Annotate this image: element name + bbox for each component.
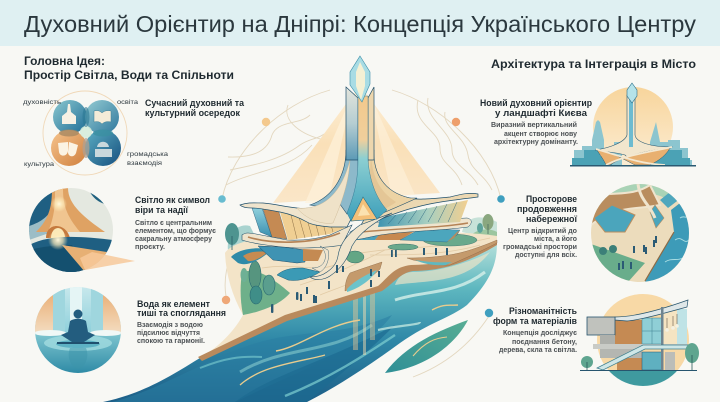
upper facade left (252, 208, 272, 237)
right roof wing (360, 185, 478, 227)
arc and contour lines (222, 90, 501, 377)
text: modern hub: культурний осередок (145, 108, 240, 118)
river (103, 243, 497, 402)
column (346, 87, 358, 160)
text: embankment body: громадські простори (503, 242, 577, 251)
panel: water (34, 287, 226, 373)
text: light body: проєкту. (135, 242, 165, 251)
building (240, 185, 478, 280)
lower floor (600, 349, 642, 358)
heading: architecture: Архітектура та Інтеграція в Місто (491, 58, 696, 71)
lawn and trees (225, 214, 494, 315)
text: water body: підсилює відчуття (137, 328, 200, 337)
panel: light (29, 188, 216, 272)
icon: church (62, 104, 76, 124)
label: education: освіта (117, 98, 138, 106)
icon: book (94, 111, 111, 124)
panel: materials (493, 294, 699, 387)
text: light body: сакральну атмосферу (135, 234, 213, 243)
label: community interaction: громадська (127, 151, 168, 158)
upper floor (615, 320, 642, 344)
people (271, 248, 448, 313)
terrace and promenade (198, 232, 497, 361)
header band (0, 0, 720, 46)
text: light heading: Світло як символ (135, 195, 210, 205)
text: water heading: Вода як елемент (137, 299, 210, 309)
text: water heading: тиші та споглядання (137, 308, 226, 318)
stairs (597, 345, 690, 370)
roof (615, 300, 688, 321)
illustration: light circle (29, 188, 135, 272)
floor slab (600, 335, 615, 344)
lower storey left (258, 246, 305, 263)
panel: new landmark (480, 83, 696, 170)
text: materials heading: Різноманітність (509, 306, 577, 316)
illustration: meditation circle (34, 287, 122, 373)
text: embankment body: доступні для всіх. (515, 250, 577, 259)
illustration: skyline with tower (570, 83, 696, 170)
icon: community (95, 142, 112, 157)
text: materials body: дерева, скла та світла. (499, 345, 577, 354)
right flare (368, 150, 417, 216)
spire (297, 56, 417, 223)
light beam (273, 85, 440, 203)
label: spirituality: духовність (23, 98, 62, 106)
label: culture: культура (24, 161, 54, 168)
heading: main idea: Простір Світла, Води та Спільноти (24, 69, 234, 82)
leaf shape (385, 320, 468, 373)
title: Духовний Орієнтир на Дніпрі: Концепція Українського Центру (24, 11, 697, 37)
left roof wing (240, 190, 353, 227)
text: landmark heading: у ландшафті Києва (495, 108, 588, 118)
illustration: embankment circle (591, 184, 689, 282)
connector dots (218, 118, 505, 317)
text: landmark heading: Новий духовний орієнтир (480, 98, 592, 108)
upper facade right (378, 200, 468, 227)
text: materials body: Концепція досліджує (503, 328, 577, 337)
trees (581, 356, 593, 368)
swoosh (310, 213, 392, 280)
text: materials heading: форм та матеріалів (493, 316, 577, 326)
lamps (667, 314, 677, 328)
text: landmark body: архітектурну домінанту. (494, 137, 578, 146)
text: materials body: поєднання бетону, (512, 337, 577, 346)
text: light body: елементом, що формує (135, 226, 216, 235)
panel: main idea (23, 55, 245, 175)
concrete box (587, 317, 615, 335)
crystal (350, 56, 370, 102)
heading: main idea: Головна Ідея: (24, 55, 105, 68)
venn diagram (23, 91, 168, 175)
text: light body: Світло є центральним (135, 218, 212, 227)
text: embankment body: міста, а його (534, 234, 578, 243)
text: embankment body: Центр відкритий до (508, 226, 578, 235)
pools (231, 248, 320, 280)
illustration: building materials (580, 294, 699, 387)
text: light heading: віри та надії (135, 205, 188, 215)
left flare (310, 150, 358, 214)
text: water body: Взаємодія з водою (137, 320, 203, 329)
text: water body: спокою та гармонії. (137, 336, 205, 345)
panel: embankment (503, 184, 689, 282)
icon: theatre masks (58, 142, 78, 156)
mid slab left (242, 225, 352, 248)
mid slab right (350, 218, 471, 240)
background hills (228, 217, 497, 250)
label: community interaction: взаємодія (127, 159, 162, 167)
text: modern hub: Сучасний духовний та (145, 98, 245, 108)
text: landmark body: акцент створює нову (504, 129, 578, 138)
panel: central illustration (103, 56, 501, 402)
text: embankment heading: набережної (526, 214, 577, 224)
text: landmark body: Виразний вертикальний (491, 120, 577, 129)
atrium triangle (351, 197, 377, 221)
text: embankment heading: Просторове (526, 194, 577, 204)
text: embankment heading: продовження (517, 204, 577, 214)
lower storey right (355, 228, 385, 240)
